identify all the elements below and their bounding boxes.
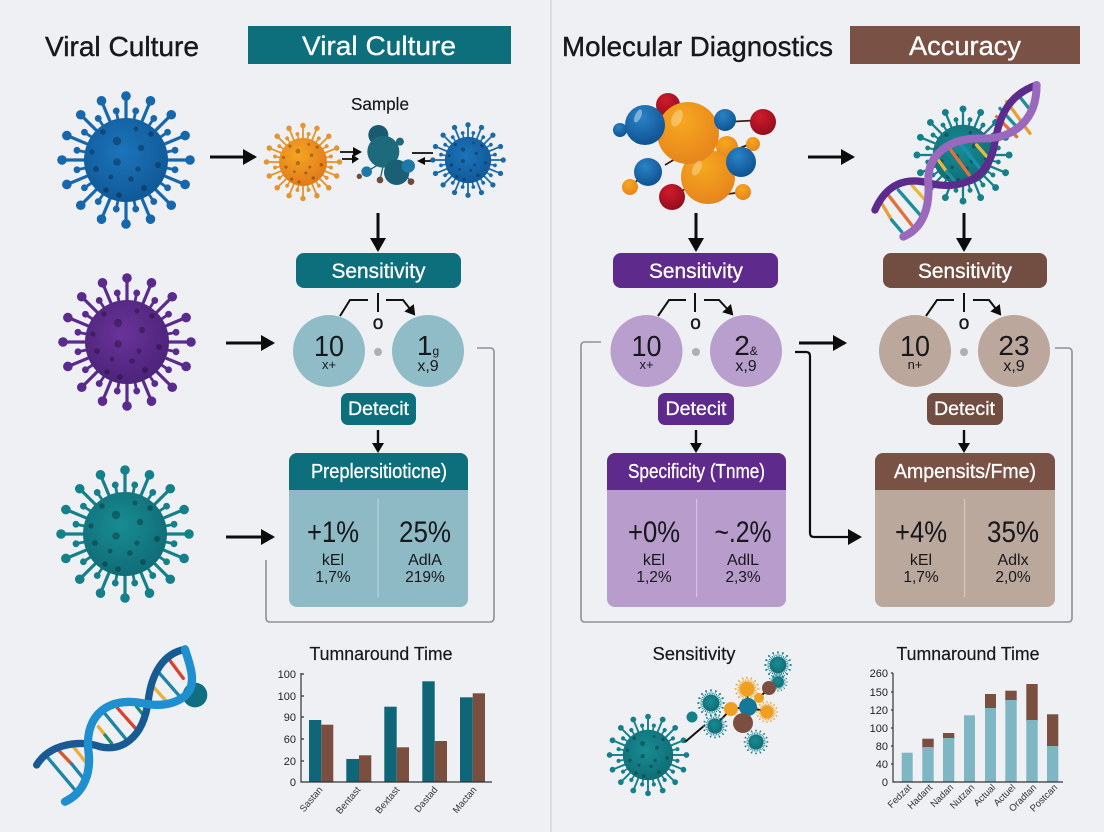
pill: sensitivity: Sensitivity (332, 260, 426, 283)
circle: right value: x,9 (417, 358, 439, 375)
table card: 1,2% (636, 569, 672, 586)
category labels: Dastad (413, 785, 440, 815)
circle: right value: x,9 (1003, 358, 1025, 375)
connectors: o (690, 313, 701, 334)
bracket: left loop (266, 348, 494, 622)
connectors (658, 293, 732, 334)
axis labels: 0 (882, 777, 888, 789)
axis labels: 40 (876, 759, 888, 771)
pill: detect: Detecit (348, 398, 410, 420)
connectors (926, 293, 1000, 334)
bars (309, 681, 485, 782)
connectors: o (959, 313, 969, 334)
arrow: dna down (962, 213, 966, 250)
table card: 2,3% (725, 569, 761, 586)
table card: Ampensits/Fme) (894, 461, 1036, 483)
arrow: detect down (377, 430, 379, 451)
category labels: Nadan (929, 782, 956, 810)
arrow: detect down (963, 430, 965, 451)
icon: blue dna helix (37, 649, 207, 802)
pill: sensitivity (883, 253, 1047, 288)
label: sensitivity network: Sensitivity (652, 643, 736, 664)
category labels: Bentast (334, 785, 364, 817)
circle: left value (610, 315, 682, 387)
panel: accuracy flow (875, 253, 1055, 607)
category labels: Actuel (992, 782, 1018, 809)
axis labels: 90 (284, 712, 296, 724)
separator dot (374, 348, 382, 356)
arrow: purple virus to circles (226, 342, 273, 344)
pill: detect (927, 393, 1003, 425)
table card: kEl (322, 552, 344, 569)
circle: right value: x,9 (735, 358, 757, 375)
icon: sample molecule (357, 125, 415, 185)
chart: turnaround time left (278, 643, 492, 817)
table card: 35% (987, 516, 1039, 549)
category labels (886, 782, 1060, 814)
circle: left value: x+ (639, 357, 654, 372)
axis labels: 20 (284, 756, 296, 768)
connectors (340, 293, 414, 334)
separator dot (692, 348, 700, 356)
table card: Specificity (Tnme) (628, 461, 765, 483)
heading: right banner (850, 26, 1080, 64)
icon: small blue virus (430, 122, 506, 198)
category labels: Fedzat (886, 782, 914, 811)
pill: sensitivity (613, 253, 778, 288)
circle: left value: x+ (322, 357, 336, 372)
table card: kEl (643, 552, 665, 569)
axes (891, 673, 1063, 782)
chart: turnaround time right (870, 643, 1063, 814)
table card (875, 453, 1055, 607)
category labels: Bextast (374, 785, 403, 816)
arrow: teal virus to table (226, 536, 273, 538)
category labels: Oradtan (1007, 782, 1039, 814)
heading: right title: Molecular Diagnostics (562, 31, 833, 62)
arrow: sample down (376, 213, 380, 250)
pill: sensitivity: Sensitivity (918, 260, 1012, 283)
category labels: Hadant (906, 782, 935, 812)
axis labels: 80 (876, 741, 888, 753)
table card: Preplersitioticne) (311, 461, 447, 483)
table card: AdlL (727, 552, 759, 569)
bracket: right loop (581, 342, 1072, 622)
icon: virus network (607, 651, 792, 796)
heading: left banner: Viral Culture (302, 31, 456, 61)
icon: teal virus (56, 465, 194, 603)
icon: blue virus (57, 91, 195, 229)
label: sample: Sample (351, 94, 409, 114)
chart title: Tumnaround Time (896, 643, 1040, 664)
heading: left title: Viral Culture (45, 31, 199, 62)
category labels: Mactan (451, 785, 479, 816)
axis labels: 100 (870, 723, 888, 735)
heading: right banner: Accuracy (909, 31, 1021, 61)
category labels: Actual (972, 782, 998, 809)
category labels (298, 785, 479, 817)
table card (289, 453, 468, 607)
axis labels: 60 (284, 734, 296, 746)
circle: right value: 23 (998, 330, 1030, 361)
table card: Adlx (997, 552, 1029, 569)
heading: left banner (248, 26, 511, 64)
arrow: molecule to dna (808, 156, 853, 158)
pill: detect (341, 393, 416, 425)
icon: molecule cluster (613, 93, 776, 210)
table card: ~.2% (714, 516, 772, 549)
circle: right value: 2& (734, 330, 758, 361)
axes (301, 673, 492, 782)
axis labels: 150 (870, 687, 888, 699)
axis labels: 120 (870, 705, 888, 717)
pill: detect (658, 393, 734, 425)
table card: 219% (405, 569, 445, 586)
pill: sensitivity: Sensitivity (649, 260, 743, 283)
panel: molecular flow (607, 253, 786, 607)
table card (607, 453, 786, 607)
category labels: Nutzan (948, 782, 977, 811)
circle: right value (392, 315, 464, 387)
axis labels: 100 (278, 669, 296, 681)
table card: 1,7% (903, 569, 939, 586)
axis labels (870, 668, 888, 789)
circle: left value (293, 315, 365, 387)
axis labels: 0 (290, 777, 296, 789)
circle: right value (978, 315, 1050, 387)
table card: +4% (895, 516, 947, 549)
table card: 2,0% (995, 569, 1031, 586)
circle: left value: 10 (314, 331, 344, 363)
icon: purple virus (58, 273, 196, 411)
icon: virus with dna helix (875, 85, 1037, 237)
panel: viral culture flow (289, 253, 468, 607)
arrow: detect down (695, 430, 697, 451)
bars (902, 684, 1058, 782)
axis labels: 100 (278, 691, 296, 703)
category labels: Sastan (298, 785, 325, 815)
connectors: o (373, 313, 383, 334)
separator dot (960, 348, 968, 356)
category labels: Postcan (1028, 782, 1060, 814)
arrow: blue virus to sample (210, 156, 255, 158)
arrow: circles to accuracy table (795, 352, 860, 537)
arrow: circles to accuracy (799, 342, 845, 344)
circle: left value: n+ (908, 357, 922, 372)
axis labels (278, 669, 296, 789)
table card: AdlA (408, 552, 442, 569)
circle: left value: 10 (900, 331, 930, 363)
table card: 1,7% (315, 569, 351, 586)
circle: right value: 1g (417, 330, 439, 361)
table card: +1% (307, 516, 359, 549)
chart title: Tumnaround Time (310, 643, 452, 664)
arrows: sample exchange (340, 147, 433, 165)
table card: +0% (628, 516, 680, 549)
circle: right value (710, 315, 782, 387)
axis labels: 260 (870, 668, 888, 680)
arrow: molecule down (694, 213, 698, 250)
circle: left value (879, 315, 951, 387)
table card: 25% (399, 516, 451, 549)
pill: detect: Detecit (934, 398, 996, 420)
icon: orange virus (264, 123, 342, 201)
pill: sensitivity (296, 253, 461, 288)
table card: kEl (910, 552, 932, 569)
circle: left value: 10 (632, 331, 662, 363)
pill: detect: Detecit (666, 398, 727, 420)
